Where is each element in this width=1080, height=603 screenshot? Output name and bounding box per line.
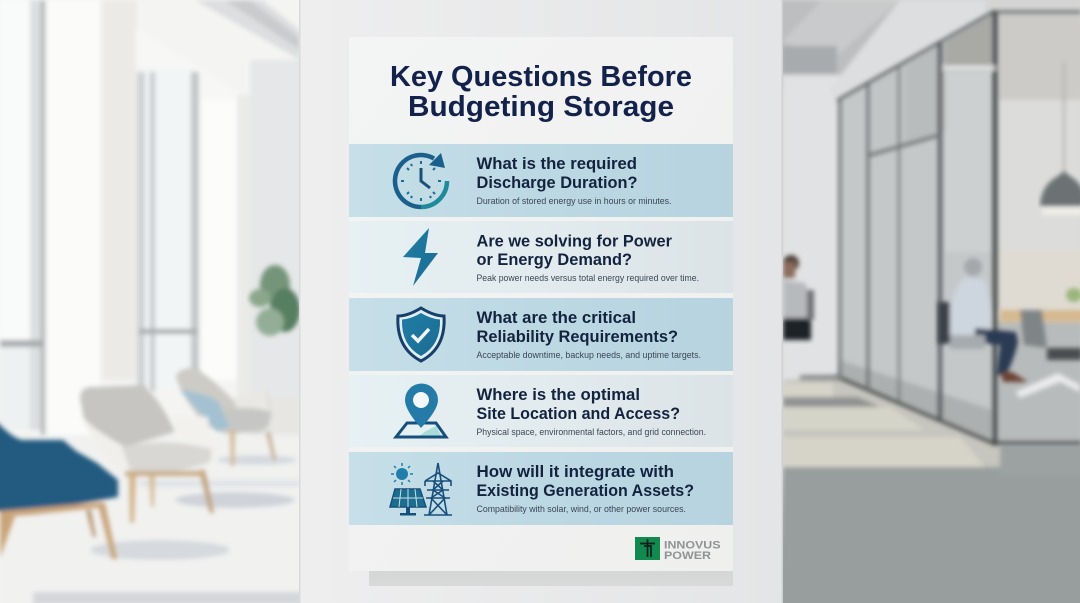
title: Key Questions Before — [390, 61, 692, 93]
background: right glass office — [778, 0, 1080, 603]
title: Budgeting Storage — [408, 91, 674, 123]
panel: power or energy — [349, 221, 733, 293]
icon: shield with check — [398, 308, 444, 361]
heading — [476, 463, 694, 500]
people and meeting room furniture — [783, 255, 1080, 398]
heading — [476, 309, 678, 346]
pendant lamp — [1040, 63, 1080, 215]
heading — [476, 155, 638, 192]
plant — [249, 265, 300, 336]
heading: What is the required — [476, 155, 637, 173]
panel: discharge duration — [349, 144, 733, 217]
panel: existing generation — [349, 452, 733, 525]
heading: or Energy Demand? — [476, 251, 632, 269]
logo wordmark: INNOVUS — [664, 540, 720, 552]
heading: How will it integrate with — [476, 463, 674, 481]
panel: site location — [349, 375, 733, 447]
heading: Discharge Duration? — [476, 174, 638, 192]
heading: Are we solving for Power — [476, 232, 673, 250]
heading: Where is the optimal — [476, 386, 640, 404]
wall behind poster — [299, 0, 783, 603]
heading — [476, 386, 680, 423]
logo: Innovus Power — [635, 537, 720, 562]
description: Compatibility with solar, wind, or other power sources. — [476, 504, 686, 515]
title — [390, 61, 692, 123]
logo wordmark — [664, 540, 720, 562]
icon: lightning bolt — [403, 228, 438, 286]
background: left office lounge — [0, 0, 305, 603]
icon: map pin — [396, 384, 446, 437]
description: Acceptable downtime, backup needs, and uptime targets. — [476, 350, 701, 361]
heading — [476, 232, 673, 269]
poster — [349, 37, 733, 571]
description: Peak power needs versus total energy required over time. — [476, 273, 699, 284]
heading: Reliability Requirements? — [476, 328, 678, 346]
glass wall frames — [838, 12, 1080, 443]
heading: What are the critical — [476, 309, 636, 327]
heading: Existing Generation Assets? — [476, 482, 694, 500]
panel: reliability — [349, 298, 733, 371]
heading: Site Location and Access? — [476, 405, 680, 423]
logo mark — [635, 537, 660, 560]
logo wordmark: POWER — [664, 550, 711, 562]
poster shadow — [369, 500, 733, 586]
icon: clock with arrow — [395, 153, 447, 207]
icon: sun, solar panel and pylon — [390, 463, 452, 516]
description: Physical space, environmental factors, and grid connection. — [476, 427, 706, 438]
armchairs — [0, 368, 276, 559]
description: Duration of stored energy use in hours or minutes. — [476, 196, 672, 207]
